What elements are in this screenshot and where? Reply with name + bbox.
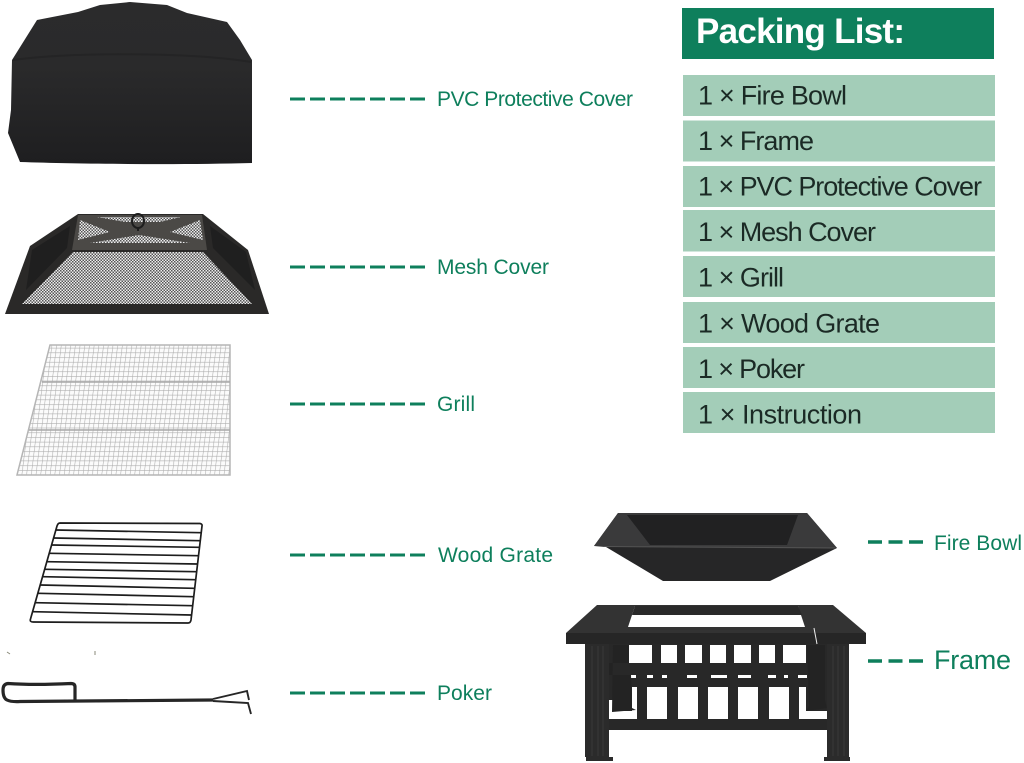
list row: Instruction: 1 × Instruction bbox=[698, 400, 862, 430]
list row: Fire Bowl bbox=[683, 75, 995, 116]
list row: Poker bbox=[683, 347, 995, 388]
list row: Frame: 1 × Frame bbox=[698, 126, 814, 156]
label: Poker: Poker bbox=[437, 682, 492, 705]
list row: Fire Bowl: 1 × Fire Bowl bbox=[698, 80, 847, 110]
list row: Mesh Cover bbox=[683, 210, 995, 252]
connector: poker bbox=[290, 692, 425, 694]
label: Grill: Grill bbox=[437, 393, 475, 416]
label: Frame: Frame bbox=[934, 645, 1011, 675]
list row: PVC Protective Cover bbox=[683, 166, 995, 207]
list row: Grill bbox=[683, 256, 995, 297]
list row: Frame bbox=[683, 120, 995, 162]
label: Wood Grate: Wood Grate bbox=[438, 544, 553, 567]
list row: Poker: 1 × Poker bbox=[698, 354, 805, 384]
connector: frame bbox=[868, 659, 923, 663]
icon: PVC protective cover bbox=[8, 2, 252, 164]
list row: Wood Grate: 1 × Wood Grate bbox=[698, 308, 880, 338]
connector: mesh cover bbox=[290, 266, 425, 268]
connector: fire bowl bbox=[868, 540, 923, 544]
list row: Mesh Cover: 1 × Mesh Cover bbox=[698, 217, 876, 247]
label: PVC Protective Cover: PVC Protective Cover bbox=[437, 88, 633, 111]
connector: PVC protective cover bbox=[290, 98, 425, 100]
icon: grill bbox=[17, 345, 230, 475]
label: Mesh Cover: Mesh Cover bbox=[437, 256, 549, 279]
heading: Packing List: Packing List: bbox=[696, 12, 905, 51]
list row: PVC Protective Cover: 1 × PVC Protective Cover bbox=[698, 172, 982, 202]
icon: mesh cover bbox=[5, 214, 269, 314]
label: Fire Bowl: Fire Bowl bbox=[934, 532, 1022, 555]
connector: wood grate bbox=[290, 554, 425, 556]
list row: Grill: 1 × Grill bbox=[698, 262, 784, 292]
heading: Packing List bbox=[682, 8, 994, 59]
icon: frame bbox=[566, 605, 866, 761]
list row: Wood Grate bbox=[683, 302, 995, 343]
icon: wood grate bbox=[30, 523, 202, 623]
panel: packing list bbox=[682, 8, 995, 433]
icon: fire bowl bbox=[594, 513, 837, 581]
list row: Instruction bbox=[683, 392, 995, 433]
icon: poker bbox=[3, 651, 251, 714]
connector: grill bbox=[290, 402, 425, 406]
